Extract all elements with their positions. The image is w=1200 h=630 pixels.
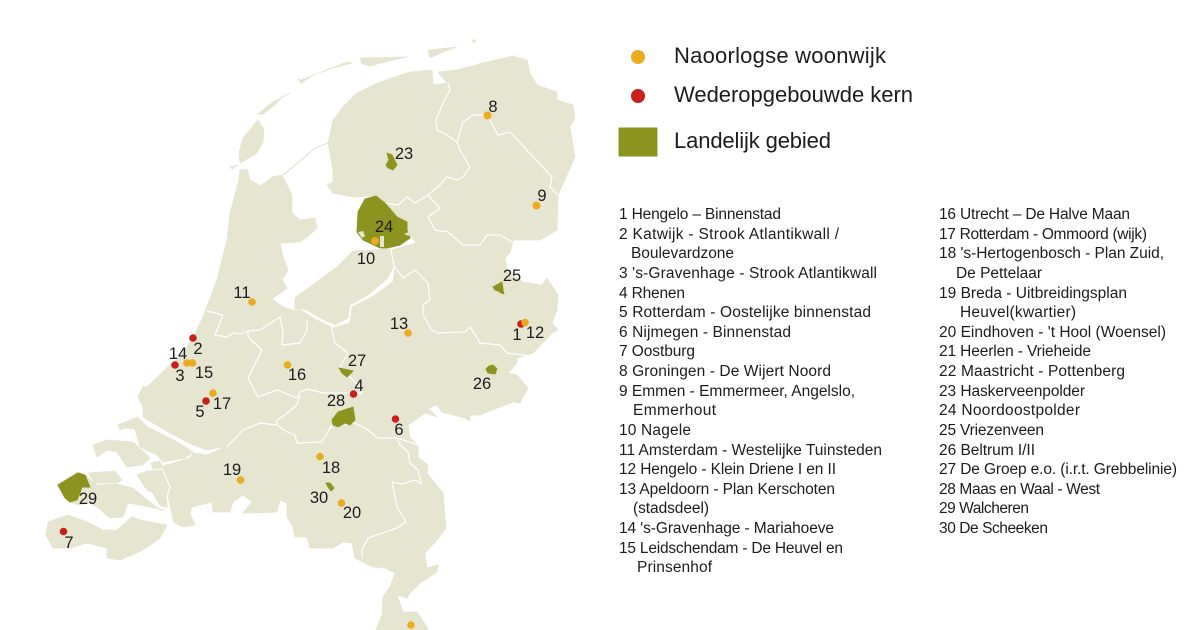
map of the Netherlands: [46, 40, 575, 630]
map number labels: 25: [503, 267, 521, 285]
map number labels: 7: [64, 534, 74, 552]
area 25: [493, 282, 504, 294]
area 28: [332, 407, 355, 427]
map number labels: 4: [354, 377, 364, 395]
site list column 1: (stadsdeel): [633, 500, 709, 517]
site list column 2: 22 Maastricht - Pottenberg: [939, 363, 1125, 380]
site list column 2: 24 Noordoostpolder: [939, 402, 1080, 419]
site list column 2: 20 Eindhoven - 't Hool (Woensel): [939, 324, 1166, 341]
map number labels: 14: [169, 345, 187, 363]
map number labels: 29: [79, 490, 97, 508]
legend: post-war neighbourhood: Naoorlogse woonwijk: [674, 43, 887, 68]
site list column 2: 27 De Groep e.o. (i.r.t. Grebbelinie): [939, 461, 1177, 478]
map number labels: 15: [195, 364, 213, 382]
site list column 1: 13 Apeldoorn - Plan Kerschoten: [619, 481, 835, 498]
Wadden islands: [230, 40, 476, 169]
site list column 1: Emmerhout: [633, 402, 717, 419]
map number labels: 3: [175, 367, 185, 385]
map number labels: 16: [288, 366, 306, 384]
post-war neighbourhood markers: [183, 112, 540, 629]
map number labels: 30: [310, 489, 328, 507]
Flevoland: [295, 249, 393, 325]
site list column 2: 29 Walcheren: [939, 500, 1029, 517]
map number labels: 17: [213, 395, 231, 413]
area 27: [339, 368, 353, 377]
site list column 1: 15 Leidschendam - De Heuvel en: [619, 540, 843, 557]
light patches in area 24: [358, 231, 409, 247]
map number labels: 19: [223, 461, 241, 479]
site list column 2: [939, 206, 1177, 537]
map number labels: 18: [322, 459, 340, 477]
site list column 1: 4 Rhenen: [619, 285, 685, 302]
site list column 1: Boulevardzone: [631, 245, 734, 262]
site list column 2: 21 Heerlen - Vrieheide: [939, 343, 1091, 360]
rebuilt centre markers: [60, 320, 525, 535]
map number labels: [64, 98, 547, 630]
site list column 1: [619, 206, 882, 576]
Tiengemeten river sliver: [173, 438, 185, 444]
map number labels: 23: [395, 145, 413, 163]
map number labels: 26: [473, 375, 491, 393]
site list column 1: 5 Rotterdam - Oostelijke binnenstad: [619, 304, 871, 321]
site list column 2: 23 Haskerveenpolder: [939, 383, 1085, 400]
site list column 2: 28 Maas en Waal - West: [939, 481, 1101, 498]
map number labels: 2: [193, 340, 203, 358]
site list column 2: 18 's-Hertogenbosch - Plan Zuid,: [939, 245, 1164, 262]
map number labels: 9: [537, 187, 547, 205]
site list column 1: 1 Hengelo – Binnenstad: [619, 206, 781, 223]
rural areas: [58, 153, 504, 502]
map number labels: 8: [488, 98, 498, 116]
site list column 1: 11 Amsterdam - Westelijke Tuinsteden: [619, 442, 882, 459]
map number labels: 6: [394, 421, 404, 439]
site list column 1: 8 Groningen - De Wijert Noord: [619, 363, 831, 380]
map number labels: 24: [375, 218, 393, 236]
site list column 2: 30 De Scheeken: [939, 520, 1048, 537]
site list column 2: 16 Utrecht – De Halve Maan: [939, 206, 1130, 223]
site list column 2: 17 Rotterdam - Ommoord (wijk): [939, 226, 1147, 243]
site list column 1: 2 Katwijk - Strook Atlantikwall /: [619, 226, 840, 243]
site list column 1: 7 Oostburg: [619, 343, 695, 360]
map number labels: 28: [327, 392, 345, 410]
legend: rural area: Landelijk gebied: [674, 128, 831, 153]
Afsluitdijk: [283, 143, 328, 175]
area 30: [326, 483, 334, 491]
province borders: [163, 83, 558, 558]
mainland: [138, 56, 575, 630]
map number labels: 1: [512, 326, 522, 344]
area 29: [58, 473, 90, 502]
site list column 1: 12 Hengelo - Klein Driene I en II: [619, 461, 836, 478]
site list column 2: 25 Vriezenveen: [939, 422, 1044, 439]
map number labels: 12: [526, 324, 544, 342]
markers drawn on top: [189, 319, 529, 367]
legend: [619, 43, 913, 156]
area 26: [486, 365, 497, 374]
map number labels: 20: [343, 504, 361, 522]
site list column 2: De Pettelaar: [956, 265, 1042, 282]
map number labels: 27: [348, 352, 366, 370]
map number labels: 11: [233, 284, 251, 302]
site list column 1: 6 Nijmegen - Binnenstad: [619, 324, 791, 341]
area 23: [386, 153, 397, 170]
site list column 2: 26 Beltrum I/II: [939, 442, 1035, 459]
Zeeland islands: [46, 417, 193, 560]
site list column 1: 10 Nagele: [619, 422, 691, 439]
site list column 2: Heuvel(kwartier): [960, 304, 1076, 321]
site list column 1: 9 Emmen - Emmermeer, Angelslo,: [619, 383, 855, 400]
site list column 1: Prinsenhof: [637, 559, 713, 576]
map number labels: 13: [390, 315, 408, 333]
legend: rural area: [619, 128, 831, 156]
area 24: [357, 196, 410, 248]
site list column 2: 19 Breda - Uitbreidingsplan: [939, 285, 1127, 302]
site list column 1: 3 's-Gravenhage - Strook Atlantikwall: [619, 265, 877, 282]
map number labels: 5: [195, 403, 205, 421]
site list column 1: 14 's-Gravenhage - Mariahoeve: [619, 520, 834, 537]
map number labels: 10: [357, 250, 375, 268]
legend: rebuilt centre: Wederopgebouwde kern: [674, 82, 913, 107]
